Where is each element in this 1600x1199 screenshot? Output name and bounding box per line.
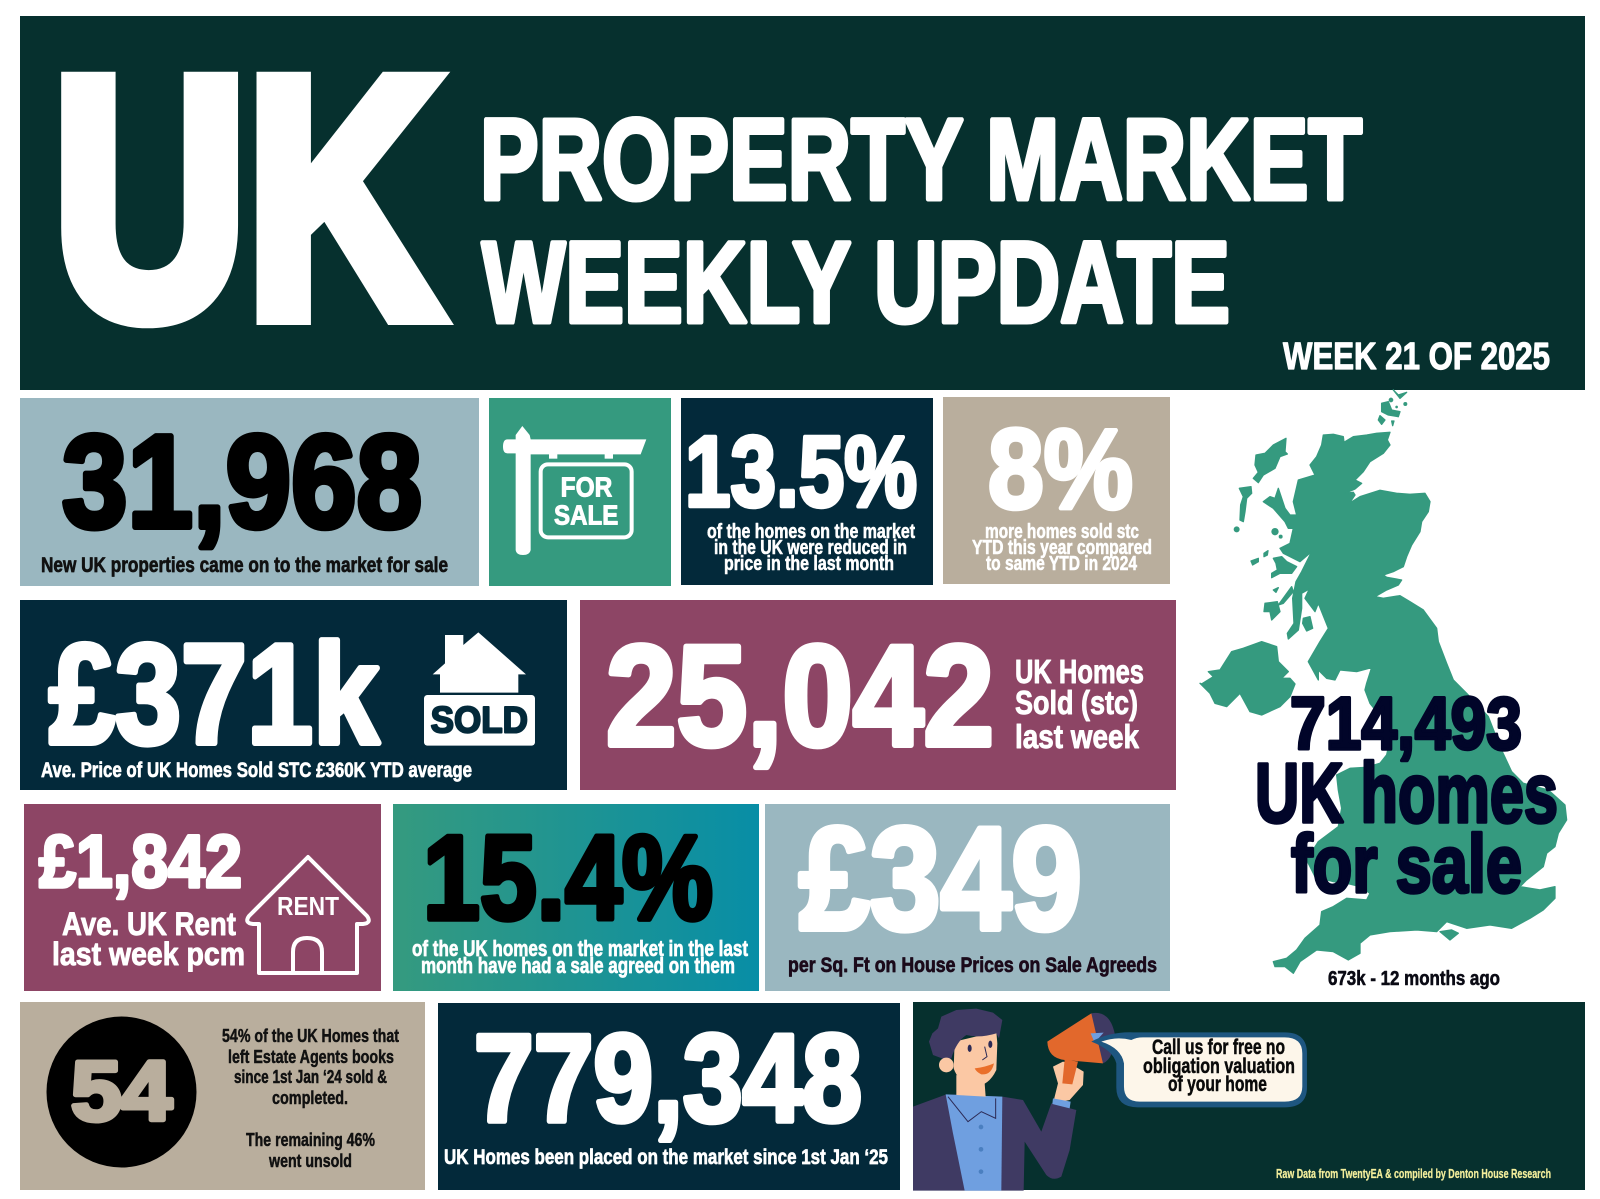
caption [1015,653,1144,755]
title: weekly update: WEEKLY UPDATE [482,219,1230,347]
caption: more homes sold stc [985,521,1139,543]
text block [222,1025,399,1171]
icon: 54 circle: 54 [71,1044,172,1138]
panel: average sold price [20,600,567,790]
number: £1,842: £1,842 [39,820,242,903]
text block: 54% of the UK Homes that [222,1025,399,1046]
icon: man with megaphone [913,1009,1115,1191]
caption: per Sq. Ft on House Prices on Sale Agreeds [788,953,1157,977]
map heading: for sale [1291,819,1522,910]
number: 15.4%: 15.4% [423,811,713,945]
title: property market: PROPERTY MARKET [480,96,1362,224]
caption: price in the last month [724,553,894,575]
caption: to same YTD in 2024 [986,553,1138,575]
icon: rent house [247,857,369,973]
caption: of the homes on the market [707,521,915,543]
callout: Call us for free no [1152,1036,1285,1059]
week label: WEEK 21 OF 2025 [1283,336,1550,378]
icon: for sale sign: SALE [554,499,618,530]
caption: month have had a sale agreed on them [421,953,735,978]
caption: last week [1015,718,1140,755]
panel: more homes sold [943,397,1170,584]
panel: price per sq ft [765,797,1170,991]
number: 779,348: 779,348 [474,1010,862,1148]
icon: sold house: SOLD [431,699,528,741]
caption [412,936,749,978]
number: £371k: £371k [49,615,380,774]
caption [52,906,245,972]
panel: sale agreed [393,804,759,991]
text block: went unsold [268,1150,352,1171]
number: 25,042: 25,042 [606,617,994,776]
caption: of the UK homes on the market in the last [412,936,749,961]
number: £349: £349 [799,797,1082,960]
callout: of your home [1168,1073,1267,1096]
caption [972,521,1152,575]
panel: price reduced [681,398,933,585]
icon: for sale sign: FOR [561,472,613,503]
panel: sold and completed [20,1002,425,1190]
caption [707,521,915,575]
caption: Ave. Price of UK Homes Sold STC £360K YTD average [41,759,472,782]
text block: since 1st Jan ‘24 sold & [234,1066,387,1087]
callout: obligation valuation [1143,1055,1295,1078]
panel: UK map [1200,390,1567,990]
icon: sold house [424,632,535,746]
panel: header [20,8,1585,390]
panel: homes placed on market [438,1003,900,1190]
icon: rent house: RENT [277,891,339,921]
caption: YTD this year compared [972,537,1152,559]
map caption: 673k - 12 months ago [1328,968,1500,990]
caption: UK Homes been placed on the market since 1st Jan ‘25 [444,1145,888,1169]
text block: completed. [272,1087,348,1108]
title: UK: UK [53,8,440,387]
panel: new properties [20,398,479,586]
caption: Ave. UK Rent [62,906,236,942]
number: 31,968: 31,968 [62,408,422,555]
callout [1091,1032,1307,1107]
number: 13.5%: 13.5% [685,416,917,528]
icon: 54 circle [46,1016,196,1168]
caption: UK Homes [1015,653,1144,690]
panel: homes sold [580,600,1176,790]
caption: in the UK were reduced in [714,537,907,559]
panel: for sale sign [489,398,671,586]
map heading: 714,493 [1290,682,1522,765]
caption: Sold (stc) [1015,684,1138,721]
text block: left Estate Agents books [228,1046,394,1067]
number: 8%: 8% [988,406,1133,532]
map: UK outline [1200,390,1567,973]
map heading [1255,682,1558,910]
panel: average rent [24,804,381,991]
caption: last week pcm [52,936,245,972]
panel: call to action [913,1002,1585,1191]
caption: New UK properties came on to the market for sale [41,554,448,577]
text block: The remaining 46% [246,1129,375,1150]
icon: for sale sign [503,426,646,555]
